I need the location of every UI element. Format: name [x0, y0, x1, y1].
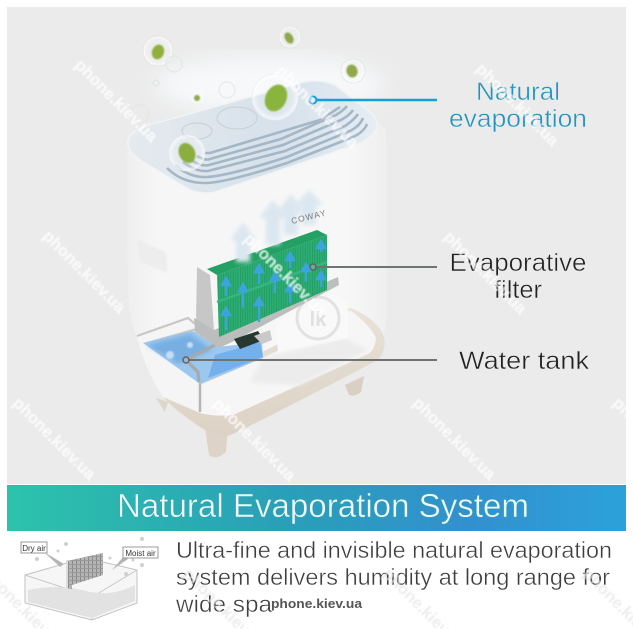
front foot — [205, 428, 228, 457]
lid top — [128, 81, 377, 193]
callout line: evaporative filter — [310, 264, 437, 270]
white inner box — [275, 293, 348, 352]
water — [143, 331, 263, 384]
humidifier device — [127, 26, 387, 457]
back foot — [156, 398, 168, 412]
watermarks: phone.kiev.ua — [9, 394, 99, 484]
tray wall edge — [137, 318, 200, 381]
watermarks: phone.kiev.ua — [409, 394, 499, 484]
body left slot — [137, 240, 167, 273]
mist glow above device — [155, 55, 385, 115]
description text — [175, 537, 612, 617]
description text: system delivers humidity at long range for — [176, 564, 610, 590]
banner title: Natural Evaporation System — [117, 487, 529, 524]
filter arrows — [222, 241, 325, 330]
control buttons — [182, 123, 212, 139]
right foot — [345, 376, 364, 396]
callout labels — [449, 78, 590, 375]
leaf bubbles — [131, 26, 365, 171]
watermarks: phone.kiev.ua — [71, 56, 161, 146]
watermarks: phone.kiev.ua — [39, 227, 129, 317]
background panel — [7, 7, 626, 484]
label: evaporative: Evaporative — [450, 249, 586, 277]
callout line: water tank — [183, 357, 437, 363]
watermarks — [9, 56, 633, 485]
label: water tank: Water tank — [459, 347, 590, 375]
description text: wide spa — [175, 591, 272, 617]
banner — [7, 485, 626, 531]
water level tube — [186, 345, 215, 382]
floor shadow — [250, 338, 368, 385]
watermarks: phone.kiev.ua — [209, 395, 299, 485]
grille vents — [167, 106, 367, 183]
description text: Ultra-fine and invisible natural evaporation — [176, 537, 612, 563]
brand logo: COWAY — [290, 207, 328, 226]
air arrows inside body — [230, 190, 323, 262]
tray front wall — [137, 318, 217, 413]
evaporative filter — [207, 230, 327, 337]
label: natural: Natural — [476, 78, 560, 106]
lower watermarks — [0, 565, 633, 629]
watermarks: phone.kiev.ua — [272, 62, 362, 152]
watermarks: phone.kiev.ua — [240, 230, 330, 320]
icon: evaporation diagram — [21, 537, 158, 620]
tray section edge — [199, 381, 201, 412]
label: evaporation: evaporation — [449, 105, 587, 133]
device body shell — [127, 118, 387, 425]
humidifier device: lk — [310, 309, 327, 331]
grey filter support — [196, 267, 214, 330]
watermarks: phone.kiev.ua — [472, 60, 562, 150]
tag: moist air: Moist air — [125, 549, 156, 558]
tag: dry air: Dry air — [22, 544, 46, 553]
callout line: natural evaporation — [310, 96, 437, 104]
label: filter: filter — [494, 276, 542, 304]
watermarks: phone.kiev.ua — [440, 228, 530, 318]
beige base — [163, 308, 385, 436]
tray floor — [200, 310, 376, 416]
domain label: phone.kiev.ua — [271, 597, 363, 611]
